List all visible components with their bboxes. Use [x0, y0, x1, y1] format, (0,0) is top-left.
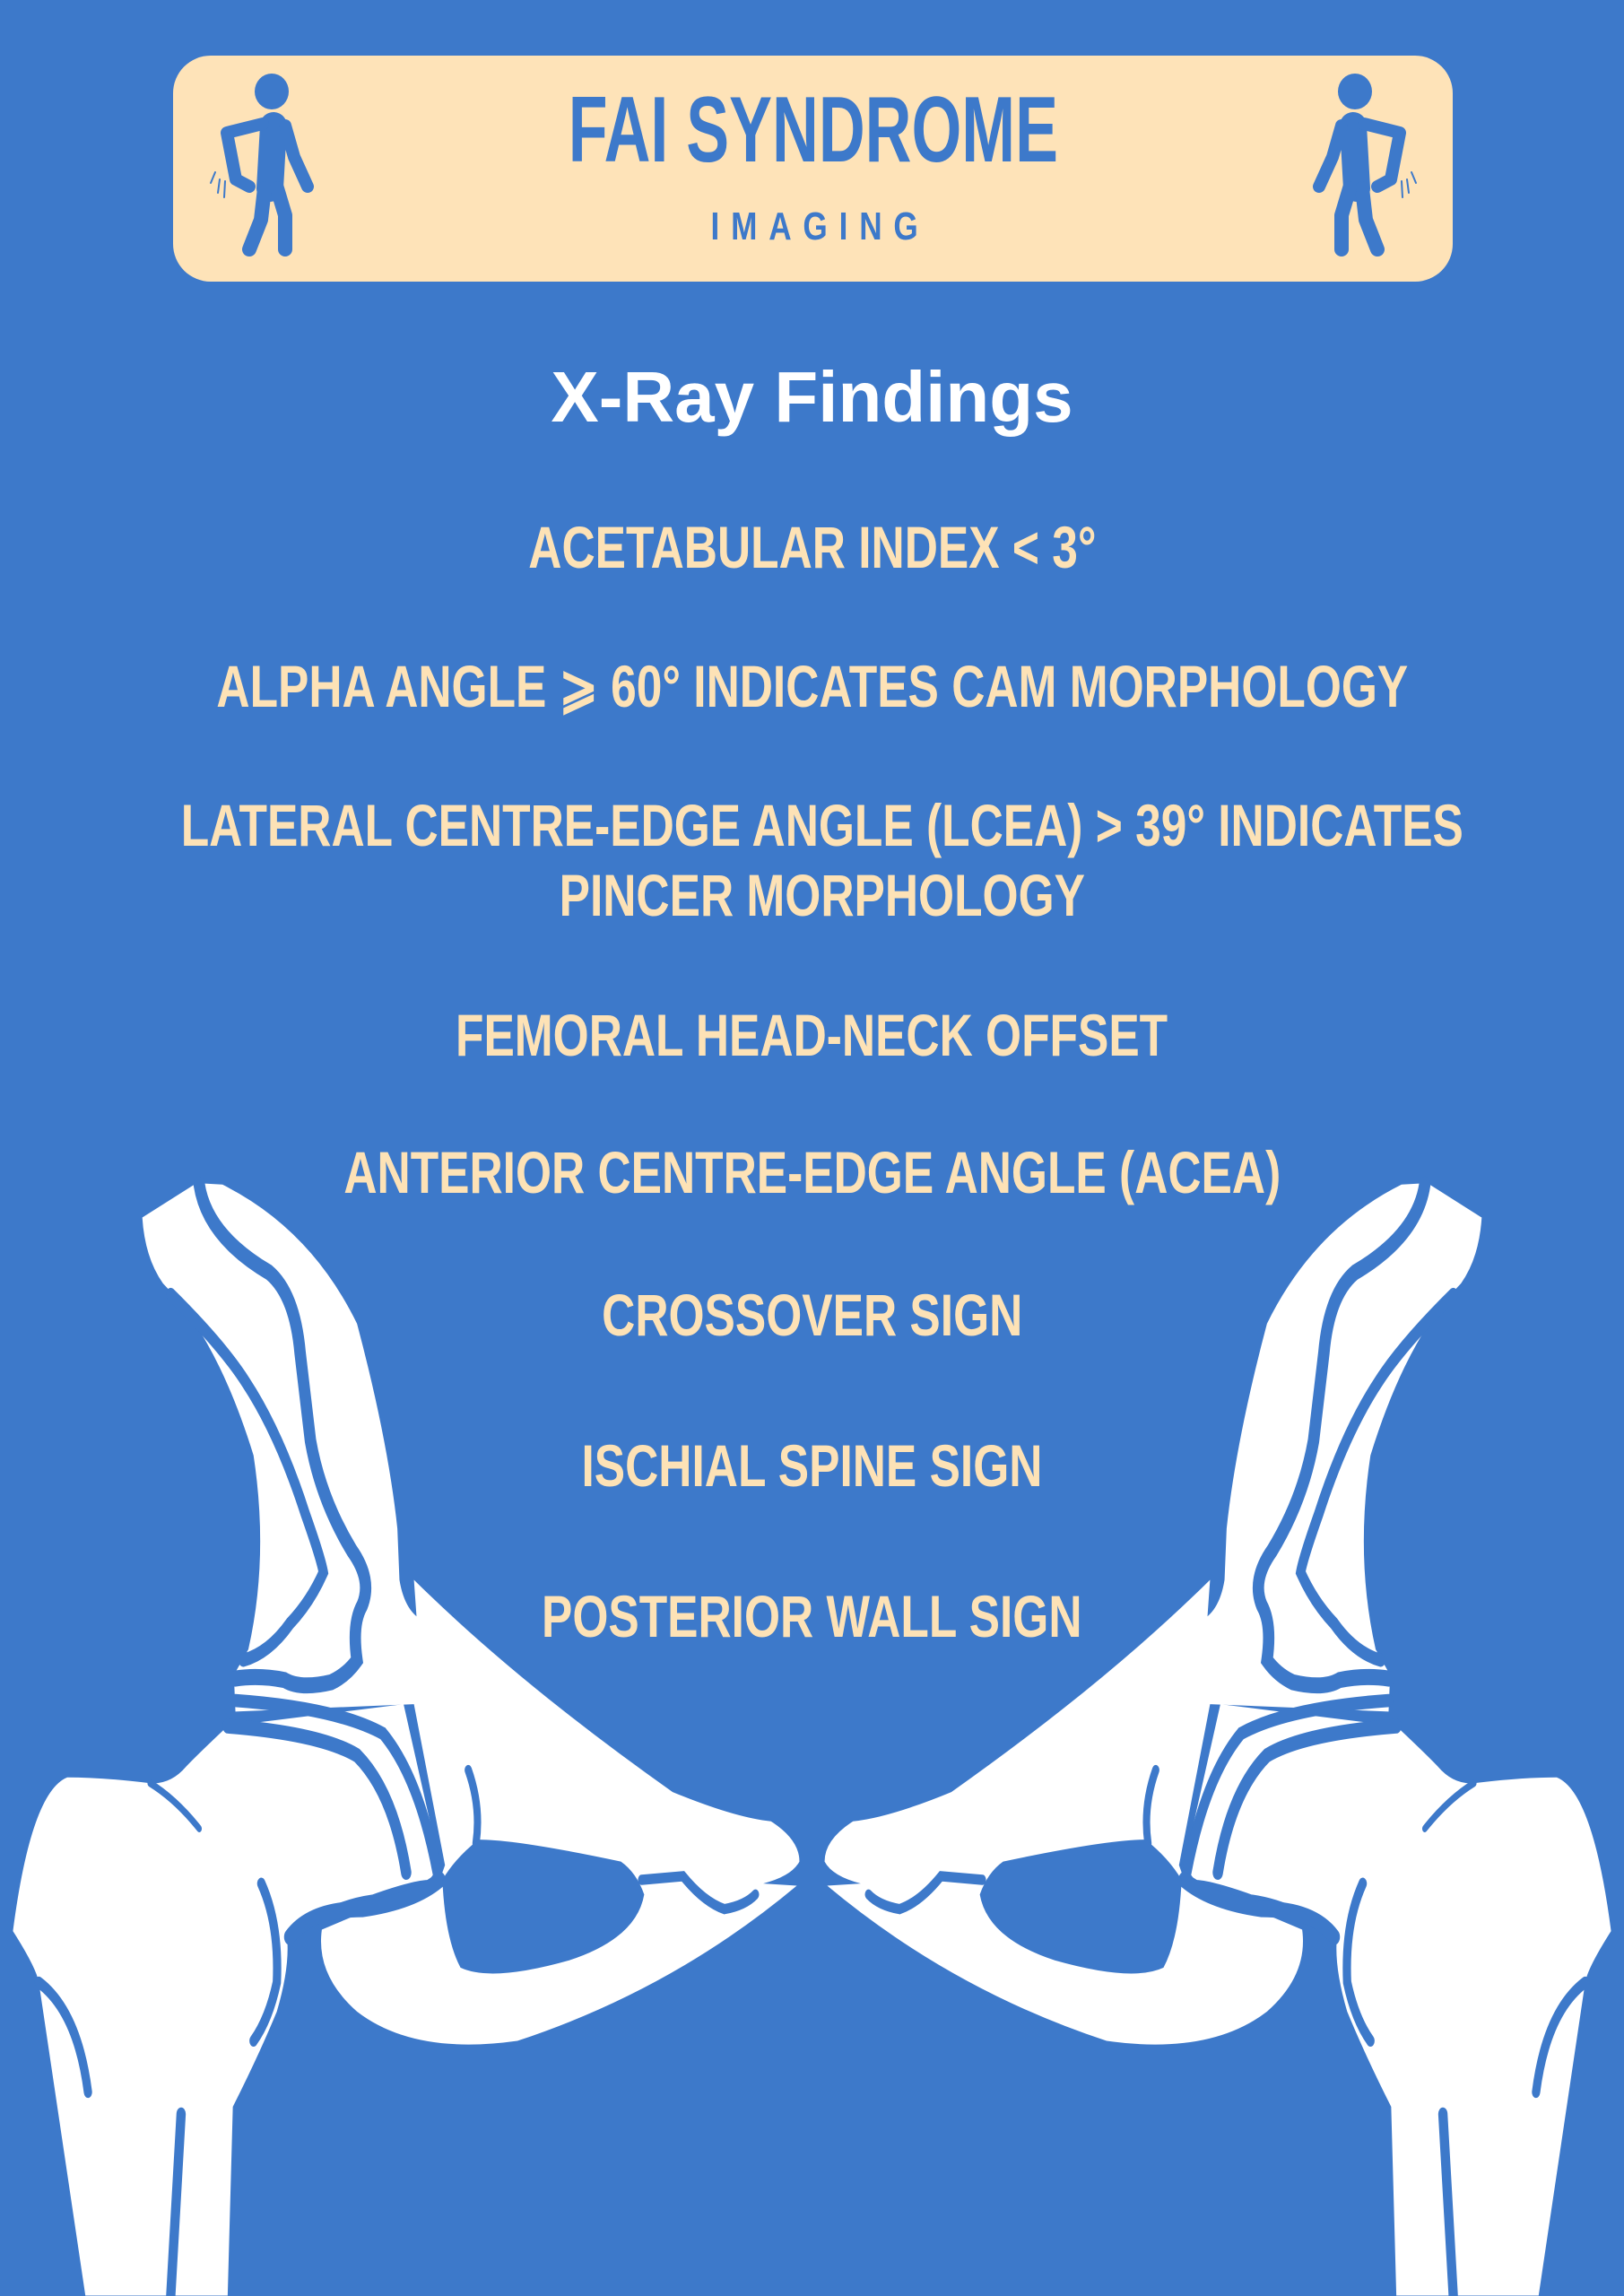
finding 4: FEMORAL HEAD-NECK OFFSET	[456, 1002, 1168, 1068]
icon: right person holding hip	[1313, 74, 1417, 257]
header banner	[173, 56, 1453, 282]
heading: X-Ray Findings: X-Ray Findings	[551, 357, 1073, 437]
finding 2: ALPHA ANGLE ⩾ 60° INDICATES CAM MORPHOLOGY	[216, 653, 1408, 719]
finding 8: POSTERIOR WALL SIGN	[542, 1583, 1082, 1649]
icon: left person holding hip	[210, 74, 314, 257]
finding 7: ISCHIAL SPINE SIGN	[582, 1432, 1042, 1499]
left hip bones	[13, 1183, 799, 2295]
finding 6: CROSSOVER SIGN	[602, 1282, 1022, 1348]
finding 1: ACETABULAR INDEX < 3°	[528, 514, 1096, 580]
finding 5: ANTERIOR CENTRE-EDGE ANGLE (ACEA)	[343, 1139, 1281, 1205]
finding 3	[181, 792, 1463, 928]
subtitle: IMAGING	[710, 204, 930, 248]
right hip bones	[825, 1183, 1611, 2295]
title: FAI SYNDROME	[568, 78, 1058, 182]
finding 3: PINCER MORPHOLOGY	[560, 862, 1085, 928]
finding 3: LATERAL CENTRE-EDGE ANGLE (LCEA) > 39° INDICATES	[181, 792, 1463, 858]
